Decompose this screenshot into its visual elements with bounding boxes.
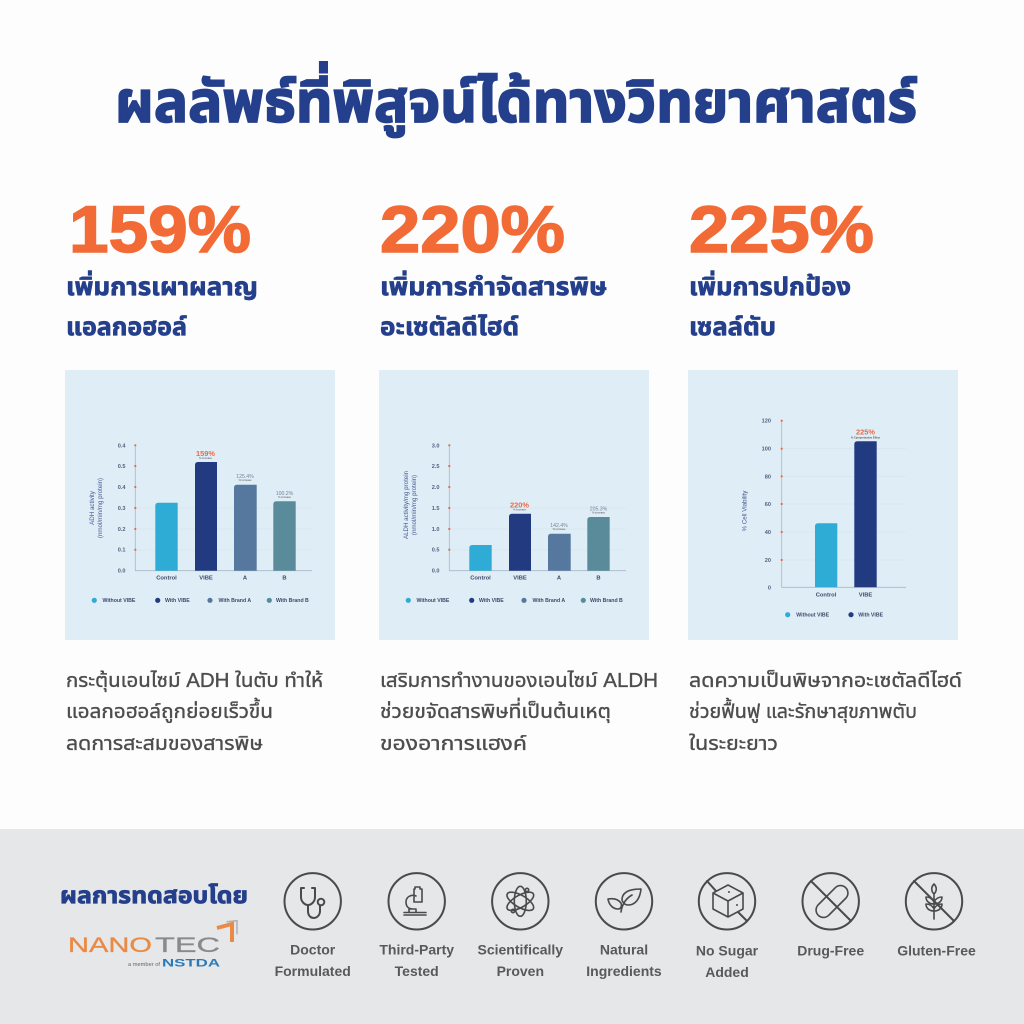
bar chart: ALDH activity: Control bbox=[470, 576, 491, 582]
bar chart: ADH activity: 0.1 bbox=[118, 548, 126, 554]
badge: no sugar added: Added bbox=[705, 964, 749, 980]
bar chart: cell viability: Without VIBE bbox=[796, 612, 830, 618]
bar chart: ADH activity: % increase bbox=[278, 495, 291, 499]
bar chart: cell viability: 0 bbox=[768, 585, 771, 591]
bar chart: cell viability: 20 bbox=[765, 558, 771, 564]
title: ผลลัพธ์ที่พิสูจน์ได้ทางวิทยาศาสตร์ bbox=[115, 61, 917, 138]
bar chart: ADH activity: % increase bbox=[239, 478, 252, 482]
description: ADH: ลดการสะสมของสารพิษ bbox=[66, 733, 263, 755]
bar chart: ALDH activity: 0.0 bbox=[432, 569, 440, 575]
subheading: toxin removal: เพิ่มการกำจัดสารพิษ bbox=[380, 270, 607, 301]
panel: alcohol metabolism bbox=[65, 192, 335, 755]
badge: natural ingredients: Natural bbox=[600, 942, 648, 958]
badge: drug-free bbox=[797, 873, 864, 958]
bar chart: ALDH activity: (nmol/min/mg protein) bbox=[411, 475, 418, 535]
description: liver: ช่วยฟื้นฟู และรักษาสุขภาพตับ bbox=[689, 697, 917, 724]
bar chart: ALDH activity: 3.0 bbox=[432, 443, 440, 449]
bar chart: ADH activity bbox=[65, 370, 335, 640]
subheading: alcohol burn: แอลกอฮอล์ bbox=[66, 313, 187, 341]
bar chart: ADH activity: 0.2 bbox=[118, 527, 126, 533]
bar chart: ALDH activity: With Brand A bbox=[532, 598, 565, 604]
bar chart: cell viability bbox=[688, 370, 958, 640]
description: liver bbox=[689, 670, 962, 755]
panel: liver cell protection bbox=[688, 192, 962, 755]
badge: scientifically proven bbox=[478, 873, 563, 979]
bar chart: ALDH activity bbox=[379, 370, 649, 640]
bar chart: ALDH activity: % increase bbox=[553, 527, 566, 531]
badge: no sugar added: No Sugar bbox=[696, 942, 759, 958]
bar chart: ALDH activity: 2.0 bbox=[432, 485, 440, 491]
bar chart: ADH activity: A bbox=[243, 576, 248, 582]
description: ALDH: เสริมการทำงานของเอนไซม์ ALDH bbox=[380, 670, 658, 692]
bar chart: ADH activity: B bbox=[282, 576, 287, 582]
badge: scientifically proven: Scientifically bbox=[478, 942, 563, 958]
bar chart: ADH activity: ADH activity bbox=[89, 490, 96, 525]
bar chart: ALDH activity: VIBE bbox=[513, 576, 527, 582]
bar chart: ALDH activity: 2.5 bbox=[432, 464, 440, 470]
bar chart: ALDH activity: 0.5 bbox=[432, 548, 440, 554]
bar chart: cell viability: 100 bbox=[762, 447, 771, 453]
description: ADH: กระตุ้นเอนไซม์ ADH ในตับ ทำให้ bbox=[66, 669, 323, 692]
stat: 220%: 220% bbox=[380, 192, 565, 266]
bar chart: cell viability: With VIBE bbox=[858, 612, 884, 618]
bar chart: ALDH activity: 220% bbox=[510, 500, 529, 510]
bar chart: cell viability: 60 bbox=[765, 502, 771, 508]
badge: doctor formulated bbox=[275, 873, 351, 979]
badge: scientifically proven: Proven bbox=[497, 963, 544, 979]
description: ALDH: ของอาการแฮงค์ bbox=[380, 733, 527, 755]
bar chart: cell viability: 80 bbox=[765, 474, 771, 480]
bar chart: ADH activity: 159% bbox=[196, 449, 215, 458]
footer band bbox=[0, 829, 1024, 1024]
bar chart: ADH activity: With Brand A bbox=[218, 598, 251, 604]
heading: tested by: ผลการทดสอบโดย bbox=[60, 882, 248, 908]
bar chart: ADH activity: 0.4 bbox=[118, 485, 126, 491]
subheading: alcohol burn bbox=[66, 270, 258, 341]
bar chart: ADH activity: 0.0 bbox=[118, 569, 126, 575]
bar chart: ADH activity: With VIBE bbox=[165, 598, 190, 604]
badge: natural ingredients bbox=[586, 873, 662, 979]
logo: NANOTEC bbox=[68, 921, 237, 970]
bar chart: ADH activity: 125.4% bbox=[236, 474, 254, 480]
bar chart: ALDH activity: With Brand B bbox=[590, 598, 623, 604]
stat: 225%: 225% bbox=[689, 192, 874, 266]
badge: third-party tested: Tested bbox=[395, 963, 439, 979]
bar chart: ADH activity: % increase bbox=[199, 456, 212, 460]
description: liver: ในระยะยาว bbox=[689, 733, 778, 755]
bar chart: ALDH activity: Without VIBE bbox=[416, 598, 450, 604]
bar chart: ALDH activity: With VIBE bbox=[479, 598, 504, 604]
bar chart: cell viability: % Cytoprotective Effect bbox=[851, 436, 880, 440]
description: ALDH bbox=[380, 670, 658, 755]
badge: third-party tested: Third-Party bbox=[379, 942, 454, 958]
subheading: toxin removal: อะเซตัลดีไฮด์ bbox=[380, 313, 519, 341]
bar chart: cell viability: % Cell Viability bbox=[742, 490, 748, 531]
description: liver: ลดความเป็นพิษจากอะเซตัลดีไฮด์ bbox=[689, 670, 962, 692]
bar chart: ALDH activity: 142.4% bbox=[550, 523, 568, 529]
panel: acetaldehyde removal bbox=[379, 192, 658, 755]
bar chart: cell viability: 225% bbox=[856, 428, 875, 436]
badge: doctor formulated: Doctor bbox=[290, 942, 336, 958]
bar chart: cell viability: Control bbox=[816, 592, 837, 598]
badge: gluten-free: Gluten-Free bbox=[897, 942, 976, 958]
bar chart: ADH activity: Control bbox=[156, 576, 177, 582]
subheading: liver protection: เพิ่มการปกป้อง bbox=[689, 270, 851, 301]
bar chart: ALDH activity: A bbox=[557, 576, 562, 582]
subheading: liver protection bbox=[689, 270, 851, 341]
bar chart: ALDH activity: % increase bbox=[513, 508, 526, 512]
bar chart: ADH activity: 0.5 bbox=[118, 464, 126, 470]
bar chart: cell viability: VIBE bbox=[859, 592, 872, 598]
subheading: alcohol burn: เพิ่มการเผาผลาญ bbox=[66, 270, 258, 301]
bar chart: cell viability: 120 bbox=[762, 419, 771, 425]
badge: no sugar added bbox=[696, 873, 759, 980]
bar chart: ADH activity: VIBE bbox=[199, 576, 213, 582]
bar chart: ADH activity: 100.2% bbox=[276, 491, 294, 497]
logo: NANOTEC: TEC bbox=[155, 934, 220, 957]
badge: drug-free: Drug-Free bbox=[797, 942, 864, 958]
logo: NANOTEC: NSTDA bbox=[162, 958, 220, 970]
bar chart: ALDH activity: ALDH activity/mg protein bbox=[403, 470, 410, 539]
bar chart: ADH activity: Without VIBE bbox=[102, 598, 136, 604]
stat: 159%: 159% bbox=[69, 192, 251, 266]
bar chart: ADH activity: (nmol/min/mg protein) bbox=[97, 478, 104, 538]
badge: gluten-free bbox=[897, 873, 976, 958]
bar chart: ALDH activity: 1.5 bbox=[432, 506, 440, 512]
bar chart: ALDH activity: % increase bbox=[592, 510, 605, 514]
bar chart: ALDH activity: 205.3% bbox=[590, 506, 608, 512]
badge: third-party tested bbox=[379, 873, 454, 979]
bar chart: ALDH activity: 1.0 bbox=[432, 527, 440, 533]
bar chart: ADH activity: With Brand B bbox=[276, 598, 309, 604]
description: ADH: แอลกอฮอล์ถูกย่อยเร็วขึ้น bbox=[66, 697, 273, 724]
logo: NANOTEC: a member of bbox=[128, 962, 161, 968]
logo: NANOTEC: NANO bbox=[68, 934, 152, 957]
badge: natural ingredients: Ingredients bbox=[586, 963, 662, 979]
bar chart: ADH activity: 0.3 bbox=[118, 506, 126, 512]
subheading: liver protection: เซลล์ตับ bbox=[689, 313, 776, 341]
bar chart: ADH activity: 0.4 bbox=[118, 443, 126, 449]
description: ALDH: ช่วยขจัดสารพิษที่เป็นต้นเหตุ bbox=[380, 697, 611, 723]
badge: doctor formulated: Formulated bbox=[275, 963, 351, 979]
subheading: toxin removal bbox=[380, 270, 607, 341]
bar chart: ALDH activity: B bbox=[596, 576, 601, 582]
bar chart: cell viability: 40 bbox=[765, 530, 771, 536]
description: ADH bbox=[66, 669, 323, 755]
